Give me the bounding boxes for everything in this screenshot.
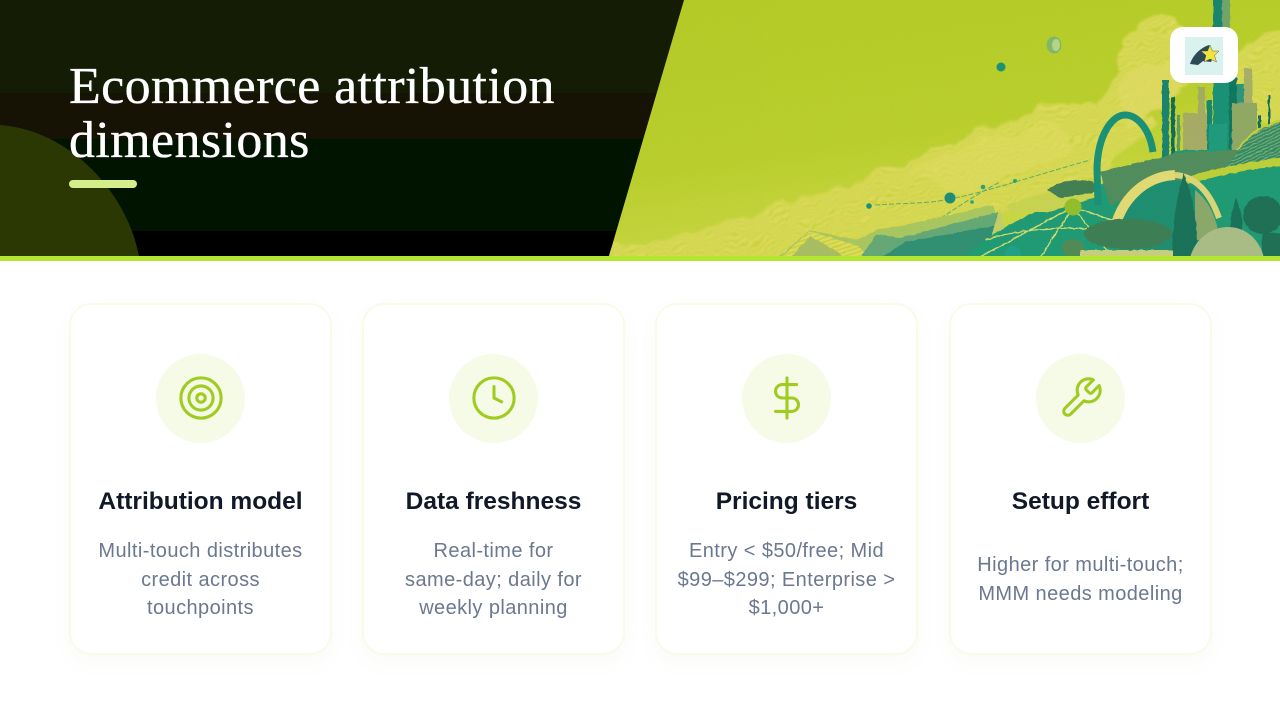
description (678, 540, 895, 619)
card: attribution model (69, 303, 332, 655)
description (98, 540, 303, 619)
heading: Data freshness (406, 488, 581, 515)
description (405, 540, 582, 619)
card: pricing tiers (655, 303, 918, 655)
mountains (780, 205, 1004, 256)
logo badge (1170, 27, 1238, 83)
description: credit across (141, 568, 260, 590)
green sphere (1064, 198, 1082, 216)
description: Real-time for (434, 540, 553, 562)
dome (1190, 227, 1264, 258)
icon: dollar sign (742, 354, 831, 443)
title: dimensions (69, 112, 310, 169)
decorative olive circle (0, 125, 139, 256)
card: setup effort (949, 303, 1212, 655)
illustrated futuristic city landscape (600, 0, 1280, 262)
icon: target (156, 354, 245, 443)
description: touchpoints (147, 597, 254, 619)
description: same-day; daily for (405, 568, 582, 590)
small teal orb (1005, 246, 1021, 256)
paper grain (600, 0, 1280, 256)
dark background bands (0, 0, 700, 256)
description: $1,000+ (749, 597, 824, 619)
heading: Attribution model (98, 488, 303, 515)
description: Higher for multi-touch; (977, 554, 1184, 576)
card: data freshness (362, 303, 625, 655)
large teal arch (1097, 115, 1153, 205)
title: Ecommerce attribution (69, 58, 555, 115)
description (977, 554, 1184, 604)
hillside ground (960, 119, 1280, 260)
title accent bar (69, 180, 137, 188)
description: weekly planning (419, 597, 568, 619)
towers (1162, 0, 1270, 165)
description: MMM needs modeling (978, 582, 1183, 604)
heading: Setup effort (1012, 488, 1149, 515)
yellow hatched clouds (600, 15, 1280, 262)
second pale arch (1113, 175, 1220, 256)
header banner (0, 0, 1280, 261)
logo mark (1185, 37, 1223, 75)
description: Entry < $50/free; Mid (689, 540, 884, 562)
title (69, 58, 555, 169)
lime divider (0, 256, 1280, 261)
trees and cypress (1062, 173, 1280, 261)
icon: wrench (1036, 354, 1125, 443)
heading: Pricing tiers (716, 488, 857, 515)
banner artwork (0, 0, 1280, 261)
description: $99–$299; Enterprise > (678, 568, 895, 590)
icon: clock (449, 354, 538, 443)
planets (866, 36, 1090, 222)
description: Multi-touch distributes (98, 540, 303, 562)
